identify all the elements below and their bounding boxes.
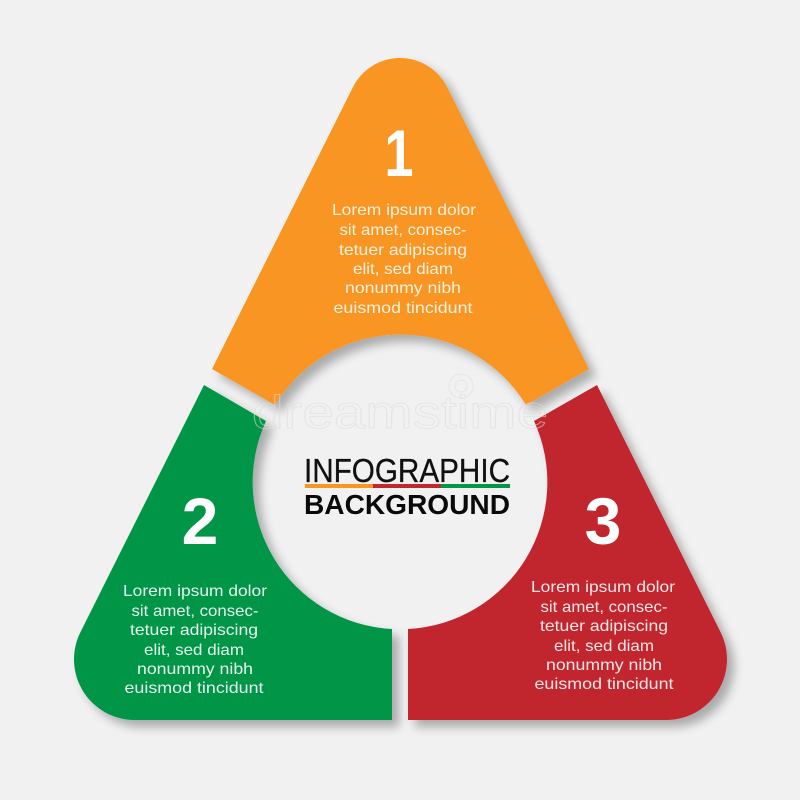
panel: segment 3 red	[408, 385, 727, 720]
text block 3: euismod tincidunt	[534, 676, 674, 693]
panel: segment 1 orange	[212, 58, 589, 405]
text block 2: tetuer adipiscing	[130, 622, 258, 639]
text block 1: tetuer adipiscing	[339, 242, 467, 259]
text block 1: Lorem ipsum dolor	[332, 202, 477, 219]
text block 1: euismod tincidunt	[334, 300, 473, 317]
watermark: dreamstime	[252, 386, 548, 438]
number 2: 2	[182, 484, 218, 558]
watermark	[252, 374, 548, 438]
text block 2: sit amet, consec-	[132, 603, 258, 620]
text block 3: elit, sed diam	[554, 638, 654, 655]
title line 1: INFOGRAPHIC	[304, 452, 510, 489]
text block 3	[531, 579, 676, 693]
text block 1: sit amet, consec-	[340, 222, 466, 239]
text block 3: nonummy nibh	[546, 657, 662, 674]
text block 1: nonummy nibh	[345, 280, 461, 297]
text block 3: sit amet, consec-	[540, 599, 668, 616]
title	[304, 452, 510, 520]
title line 2: BACKGROUND	[304, 489, 510, 520]
text block 3: tetuer adipiscing	[540, 618, 668, 635]
text block 1	[332, 202, 477, 317]
number 3: 3	[585, 484, 621, 558]
number 1: 1	[384, 116, 414, 190]
panel: segment 2 green	[74, 385, 392, 720]
text block 3: Lorem ipsum dolor	[531, 579, 676, 596]
text block 2: euismod tincidunt	[124, 680, 264, 697]
text block 2: elit, sed diam	[144, 642, 244, 659]
text block 2	[123, 583, 268, 697]
text block 2: nonummy nibh	[137, 661, 253, 678]
text block 1: elit, sed diam	[353, 261, 453, 278]
text block 2: Lorem ipsum dolor	[123, 583, 268, 600]
tricolor divider	[305, 484, 510, 488]
